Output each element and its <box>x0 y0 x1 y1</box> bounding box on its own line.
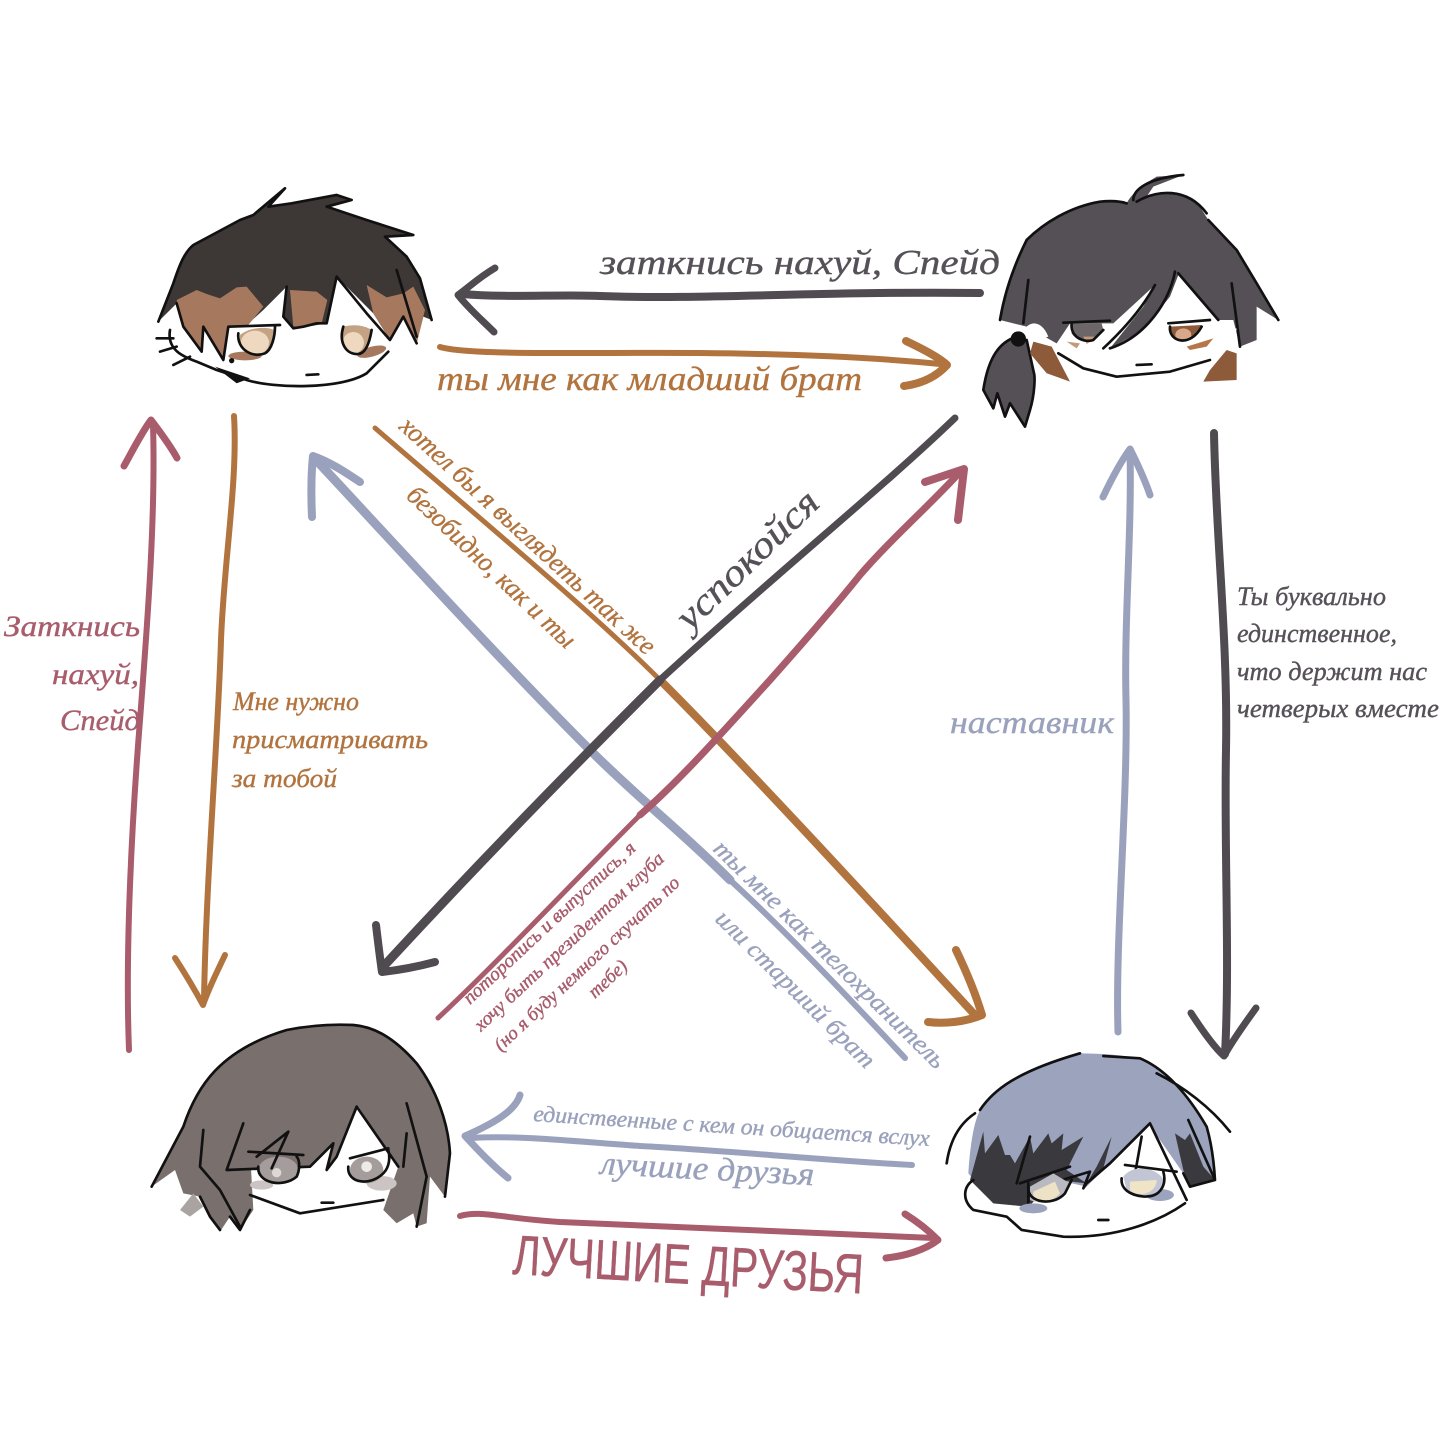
label: need to look after you: Мне нужно <box>232 687 359 716</box>
label: wish I looked as harmless: хотел бы я выглядеть так же <box>393 410 662 661</box>
label: like a younger brother: ты мне как младший брат <box>437 361 862 398</box>
label: hurry up and graduate: хочу быть президентом клуба <box>469 848 669 1036</box>
label: you literally hold us together: единственное, <box>1237 619 1397 648</box>
label: like a bodyguard or older brother: или старший брат <box>710 905 880 1074</box>
character head: bottom right, blue-grey hair <box>947 1053 1230 1237</box>
arrow: diagonal, top right to bottom left, dark <box>376 418 955 972</box>
label: best friends, red capitals: ЛУЧШИЕ ДРУЗЬЯ <box>511 1223 865 1306</box>
arrow: top, from right to left, dark <box>458 268 980 332</box>
arrow: diagonal, bottom right to top left, blue <box>311 456 905 1058</box>
label: you literally hold us together: Ты буквально <box>1237 582 1386 611</box>
label: hurry up and graduate: (но я буду немного скучать по <box>490 873 684 1056</box>
character head: top left, dark hair with brown tips <box>157 188 432 386</box>
label: hurry up and graduate: тебе) <box>584 956 632 1003</box>
label: need to look after you: за тобой <box>231 764 337 793</box>
arrow: bottom, from right to left, blue <box>465 1095 912 1178</box>
arrow: diagonal, top left to bottom right, brown <box>375 428 982 1023</box>
label: calm down: успокойся <box>664 481 828 642</box>
label: hurry up and graduate: поторопись и выпустись, я <box>459 838 640 1009</box>
arrow: bottom, from left to right, red <box>460 1214 938 1258</box>
label: shut up, Spade: Заткнись <box>4 610 140 643</box>
arrow: left side, downward, brown <box>175 416 235 1005</box>
arrow: diagonal, bottom left to top right, red <box>438 469 964 1018</box>
label: mentor: наставник <box>950 704 1115 740</box>
label: wish I looked as harmless: безобидно, как и ты <box>401 480 583 654</box>
label: shut up, Spade: Спейд <box>60 704 140 737</box>
arrow: top, from left to right, brown <box>440 341 947 386</box>
arrow: right side, downward, dark <box>1191 433 1256 1056</box>
label: you literally hold us together: четверых вместе <box>1237 694 1439 723</box>
label: shut up: заткнись нахуй, Спейд <box>599 243 1000 282</box>
arrow: left side, upward, red <box>124 420 177 1050</box>
label: shut up, Spade <box>4 610 140 737</box>
label: the only ones he talks to aloud: единственные с кем он общается вслух <box>533 1101 931 1151</box>
character head: top right, grey hair with ponytail <box>983 175 1278 427</box>
label: need to look after you <box>231 687 428 793</box>
label: like a bodyguard or older brother: ты мне как телохранитель <box>708 835 951 1074</box>
arrow: right side, upward, blue <box>1103 449 1150 1032</box>
character head: bottom left, grey-brown hair with glasses <box>152 1025 450 1232</box>
label: shut up, Spade: нахуй, <box>52 658 139 691</box>
label: best friends, blue: лучшие друзья <box>597 1146 815 1193</box>
label: you literally hold us together <box>1237 582 1439 723</box>
label: you literally hold us together: что держит нас <box>1237 657 1427 686</box>
label: need to look after you: присматривать <box>232 725 428 754</box>
